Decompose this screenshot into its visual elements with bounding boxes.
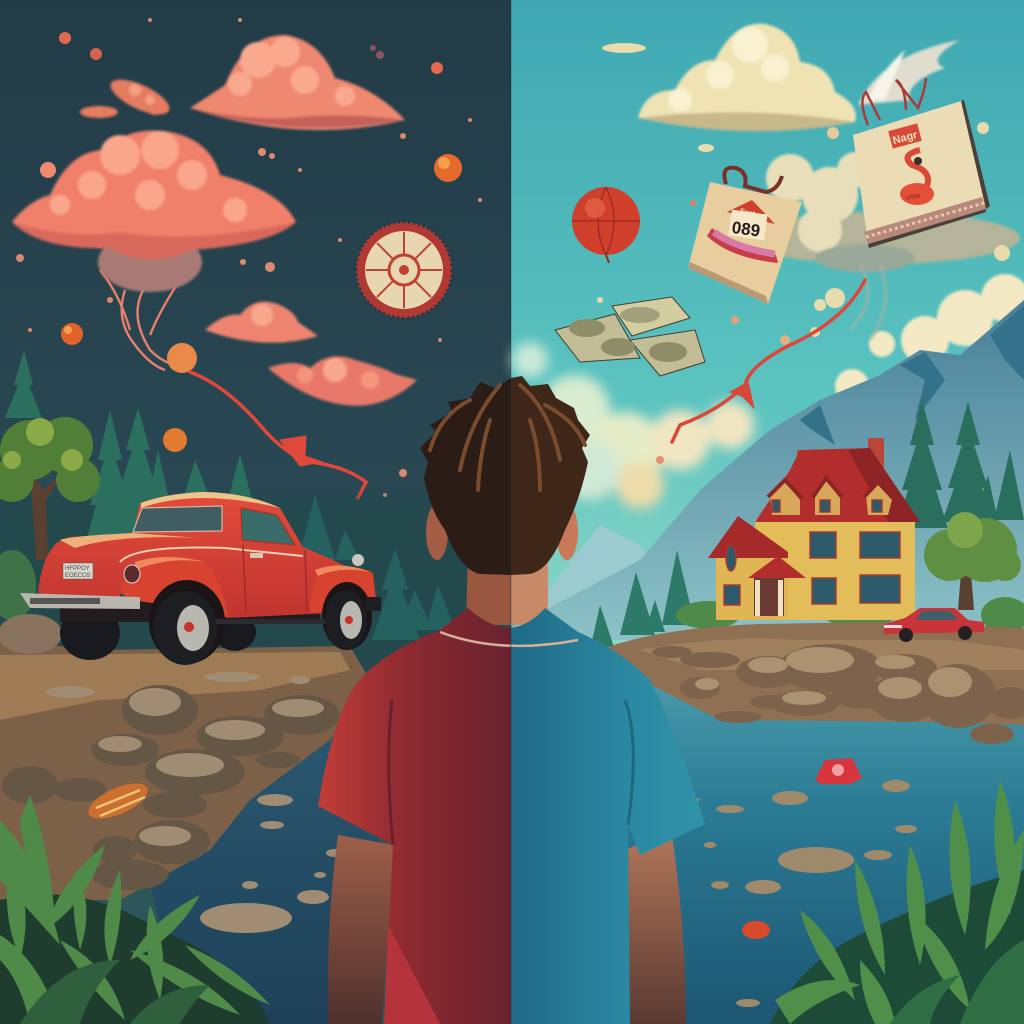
mountains right (540, 300, 1024, 640)
plants left (0, 795, 270, 1024)
small clouds right (597, 43, 1010, 464)
feather wing (858, 40, 960, 105)
boy seen from behind (318, 376, 705, 1024)
rear wheel (153, 591, 217, 665)
chrome strip (120, 548, 303, 562)
rocks left (0, 614, 344, 933)
wheel arches (149, 580, 225, 664)
water right (600, 660, 1024, 1024)
icon: shopping bag right: Nagr (891, 129, 919, 147)
arrow: red ribbon right (672, 280, 865, 442)
far wheels (60, 606, 120, 660)
bed highlight (60, 533, 200, 548)
bag label: 089 (731, 218, 761, 241)
divider: center split (510, 0, 512, 1024)
shirt: blue half (511, 608, 705, 1024)
tendrils (100, 270, 180, 370)
license plate (63, 563, 93, 579)
cloud: small coral wisps (80, 73, 174, 121)
rear bumper (20, 593, 140, 609)
neck (466, 550, 511, 625)
cloud: middle coral (205, 302, 318, 343)
license plate: HFPPOY (65, 566, 90, 572)
underbody shadow (60, 600, 320, 622)
door line (243, 545, 307, 612)
hair right half (511, 376, 590, 575)
icon: pile of banknotes (555, 297, 705, 376)
cloud: behind the bags (740, 152, 1020, 340)
icon: basketball balloon (572, 187, 640, 263)
horizon clouds (512, 342, 754, 509)
cloud: big left coral with tendrils (12, 130, 296, 370)
icon: shopping bag right (853, 40, 990, 248)
house (708, 438, 920, 620)
arm: right (622, 835, 686, 1024)
forest and trees right (590, 400, 1024, 650)
arrow: red ribbon left (190, 372, 366, 498)
hair highlights (430, 385, 585, 490)
ears (426, 504, 448, 560)
cloud: top right cream (638, 24, 856, 131)
icon: shopping bag left (688, 168, 802, 304)
water left (150, 700, 380, 1024)
front wheel (325, 590, 367, 650)
icon: floating red telephone and ball (742, 758, 862, 939)
icon: shopping bag left: Eqst (739, 208, 756, 218)
broad tree (30, 470, 65, 560)
rear fender (120, 555, 228, 618)
ground left (0, 640, 370, 900)
icon: roulette wheel (356, 222, 452, 318)
ground right (605, 622, 1024, 725)
door window (241, 508, 295, 545)
shirt: red half (318, 608, 511, 1024)
arm: left (328, 835, 394, 1024)
hair left half (420, 378, 511, 575)
cloud: lower coral (268, 356, 417, 406)
plants right (770, 780, 1024, 1024)
license plate: EOECOS (65, 573, 91, 579)
stars and floating specks (16, 18, 482, 497)
icon: shopping bag right: UNIN (905, 194, 921, 202)
rear window (133, 506, 222, 532)
icon: corn cob on rocks (83, 776, 153, 826)
small red car (884, 608, 984, 642)
roof highlight (141, 492, 280, 508)
cab and body (38, 492, 376, 618)
cloud: large top left coral (190, 35, 405, 130)
forest left (0, 350, 510, 680)
panel: dark left sky (0, 0, 511, 1024)
front fender (310, 566, 376, 612)
icon: orange planets (61, 154, 462, 452)
panel: bright right sky (511, 0, 1024, 1024)
red pickup truck (20, 492, 381, 665)
running board (216, 619, 326, 624)
red lower highlight (384, 925, 440, 1024)
rocks right (652, 644, 1024, 1007)
